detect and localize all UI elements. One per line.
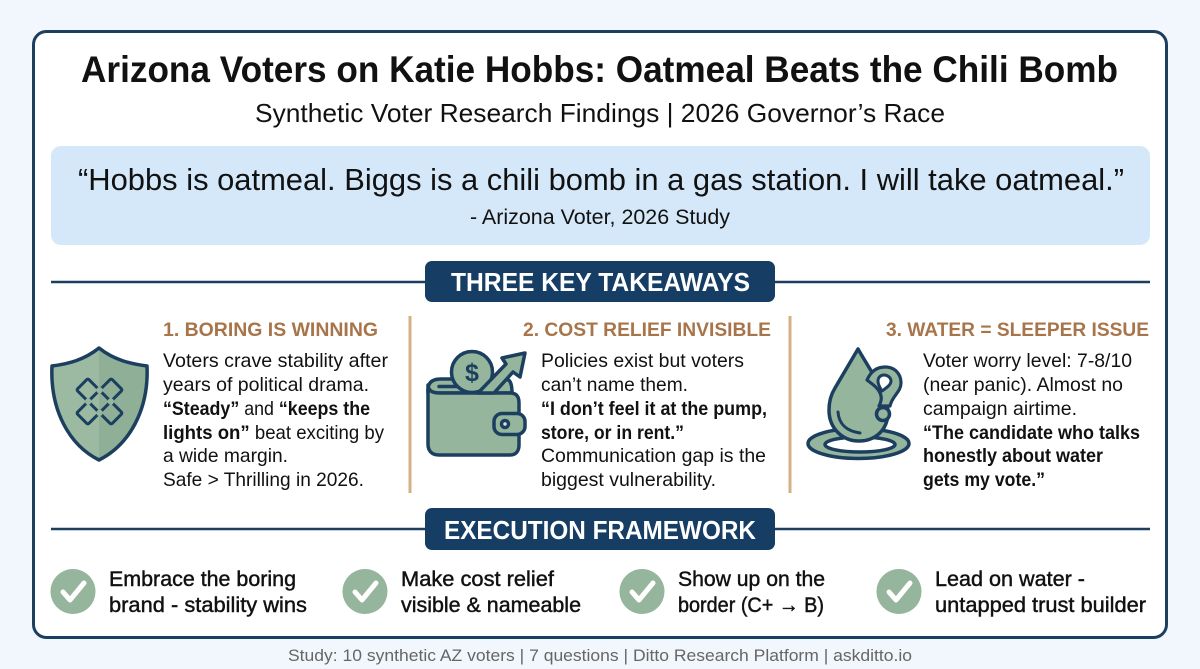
text block: water sleeper issue: honestly about water bbox=[923, 445, 1103, 467]
heading: three key takeaways bbox=[425, 261, 775, 302]
text block: cost relief invisible: biggest vulnerability. bbox=[541, 469, 716, 491]
text block: boring is winning: Voters crave stability after bbox=[163, 350, 389, 372]
action: embrace the boring brand bbox=[50, 567, 307, 617]
text block: boring is winning: “Steady” and “keeps the bbox=[163, 398, 370, 420]
action text bbox=[401, 567, 581, 617]
action text: Make cost relief bbox=[401, 567, 554, 591]
panel: takeaway 1 bbox=[52, 320, 389, 491]
panel: takeaway 3 bbox=[808, 320, 1149, 491]
icon: water drop with question mark bbox=[808, 349, 909, 458]
heading: water sleeper issue: 3. WATER = SLEEPER ISSUE bbox=[886, 320, 1149, 341]
action text bbox=[109, 567, 307, 617]
text block: boring is winning: years of political drama. bbox=[163, 374, 369, 396]
action: lead on water bbox=[876, 567, 1146, 617]
footer: Study: 10 synthetic AZ voters | 7 questions | Ditto Research Platform | askditto.io bbox=[288, 647, 912, 665]
action text: Lead on water - bbox=[935, 567, 1085, 591]
panel: takeaway 2 bbox=[428, 320, 771, 491]
title: Arizona Voters on Katie Hobbs: Oatmeal Beats the Chili Bomb bbox=[81, 49, 1118, 90]
text block: water sleeper issue: gets my vote.” bbox=[923, 469, 1045, 491]
subtitle: Synthetic Voter Research Findings | 2026 Governor’s Race bbox=[255, 98, 945, 128]
text block: water sleeper issue: campaign airtime. bbox=[923, 398, 1077, 420]
text block: water sleeper issue: (near panic). Almost no bbox=[923, 374, 1123, 396]
action text: Embrace the boring bbox=[109, 567, 296, 591]
icon: check bbox=[342, 569, 388, 614]
text block: water sleeper issue bbox=[923, 350, 1140, 491]
quote attribution: - Arizona Voter, 2026 Study bbox=[470, 206, 730, 229]
heading: boring is winning: 1. BORING IS WINNING bbox=[163, 320, 378, 341]
text block: boring is winning: a wide margin. bbox=[163, 445, 288, 467]
text block: water sleeper issue: Voter worry level: 7-8/10 bbox=[923, 350, 1132, 372]
icon: check bbox=[876, 569, 922, 614]
text block: cost relief invisible: “I don’t feel it at the pump, bbox=[541, 398, 767, 420]
text block: cost relief invisible: store, or in rent.” bbox=[541, 422, 684, 444]
panel: voter quote bbox=[51, 146, 1150, 245]
icon: check bbox=[50, 569, 96, 614]
action text: brand - stability wins bbox=[109, 593, 307, 617]
icon: wallet with coin and arrow: $ bbox=[465, 359, 479, 387]
action: make cost relief visible bbox=[342, 567, 581, 617]
action text: border (C+ → B) bbox=[678, 593, 824, 617]
text block: cost relief invisible bbox=[541, 350, 767, 491]
action text: Show up on the bbox=[678, 567, 825, 591]
action text bbox=[935, 567, 1146, 617]
heading: cost relief invisible: 2. COST RELIEF INVISIBLE bbox=[523, 320, 771, 341]
action text: untapped trust builder bbox=[935, 593, 1146, 617]
icon: shield bbox=[52, 348, 147, 460]
action: show up on the border bbox=[620, 567, 825, 617]
text block: boring is winning bbox=[163, 350, 389, 491]
text block: cost relief invisible: Communication gap is the bbox=[541, 445, 766, 467]
text block: boring is winning: lights on” beat exciting by bbox=[163, 422, 384, 444]
text block: cost relief invisible: Policies exist but voters bbox=[541, 350, 744, 372]
text block: water sleeper issue: “The candidate who talks bbox=[923, 422, 1140, 444]
action text bbox=[678, 567, 825, 617]
icon: check bbox=[620, 569, 664, 614]
heading: execution framework bbox=[425, 508, 775, 550]
quote text: “Hobbs is oatmeal. Biggs is a chili bomb in a gas station. I will take oatmeal.” bbox=[78, 162, 1124, 197]
text block: boring is winning: Safe > Thrilling in 2026. bbox=[163, 469, 364, 491]
action text: visible & nameable bbox=[401, 593, 581, 617]
heading: three key takeaways: THREE KEY TAKEAWAYS bbox=[451, 267, 750, 297]
text block: cost relief invisible: can’t name them. bbox=[541, 374, 688, 396]
heading: execution framework: EXECUTION FRAMEWORK bbox=[444, 515, 756, 545]
icon: wallet with coin and arrow bbox=[428, 352, 525, 455]
